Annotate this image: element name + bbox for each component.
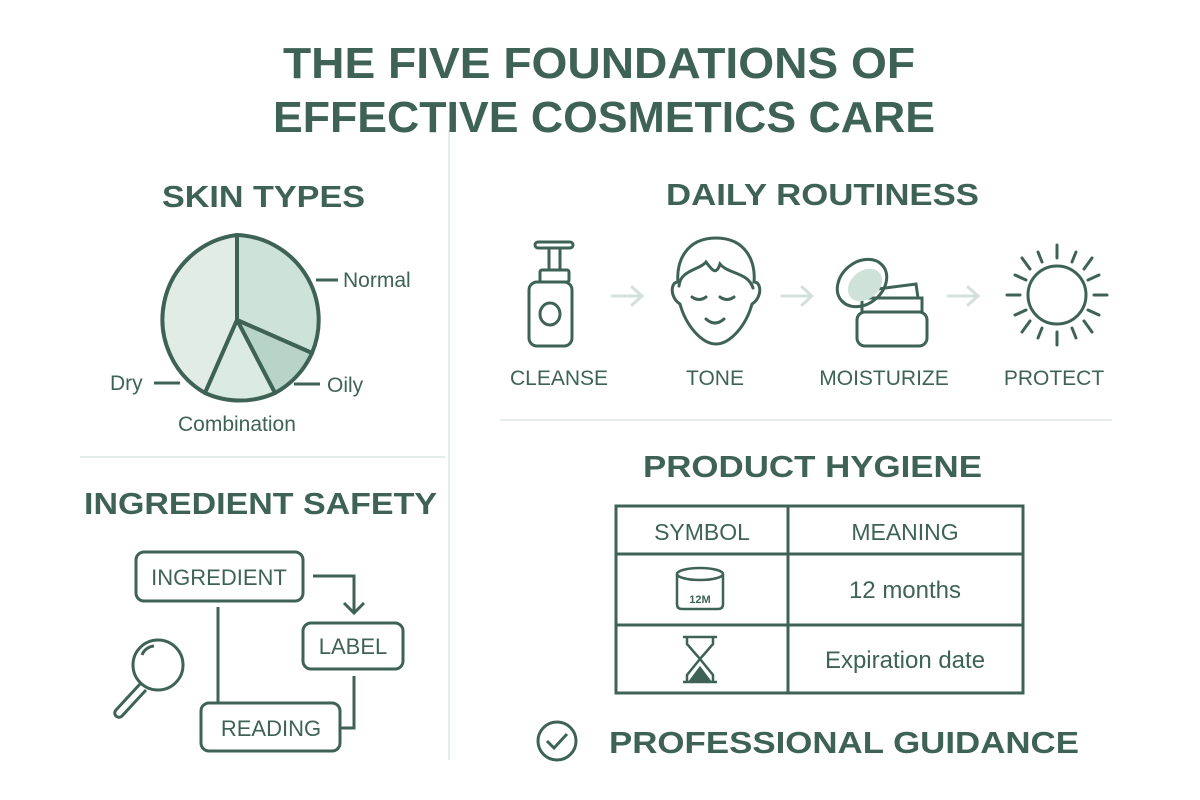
arrow [782,287,812,305]
table: product hygiene: 12 months [849,577,961,604]
professional guidance: PROFESSIONAL GUIDANCE [609,725,1079,760]
title [273,39,935,142]
step labels: MOISTURIZE [819,367,949,390]
routine steps [529,238,1107,346]
icon: face [672,238,760,344]
table: product hygiene: 12M [689,594,711,606]
text: LABEL [319,634,387,659]
icon: check circle [538,722,576,760]
box: ingredient [136,552,303,601]
heading: skin types: SKIN TYPES [162,179,365,214]
step labels: TONE [686,367,744,390]
icon: sun [1007,245,1107,345]
icon: magnifier [115,640,183,717]
heading: daily routiness: DAILY ROUTINESS [666,177,979,212]
icon: cream jar [828,250,927,346]
pie labels: Oily [327,374,364,397]
step labels: PROTECT [1004,367,1104,390]
table: product hygiene [616,506,1023,693]
text: READING [221,716,321,741]
table: product hygiene: Expiration date [825,647,985,674]
icon: jar 12M [677,568,723,609]
pie labels [110,269,411,436]
text: INGREDIENT [151,565,287,590]
icon: cleanser bottle [529,242,573,346]
title: THE FIVE FOUNDATIONS OF [283,39,915,88]
title: EFFECTIVE COSMETICS CARE [273,93,935,142]
icon: hourglass [683,637,717,682]
heading: product hygiene: PRODUCT HYGIENE [643,449,982,484]
pie labels: Combination [178,413,296,436]
arrow [612,287,642,305]
connector: label to reading [340,676,354,728]
table: product hygiene: MEANING [851,519,959,545]
step labels: CLEANSE [510,367,608,390]
arrow: ingredient to label [313,576,364,613]
flow diagram: ingredient safety [115,552,403,751]
table: product hygiene: SYMBOL [654,519,750,545]
pie labels: Normal [343,269,411,292]
pie chart: skin types [154,235,338,401]
arrow [948,287,978,305]
step labels [510,367,1104,390]
heading: ingredient safety: INGREDIENT SAFETY [84,486,437,521]
box: label [303,623,403,669]
box: reading [201,703,340,751]
pie labels: Dry [110,372,143,395]
